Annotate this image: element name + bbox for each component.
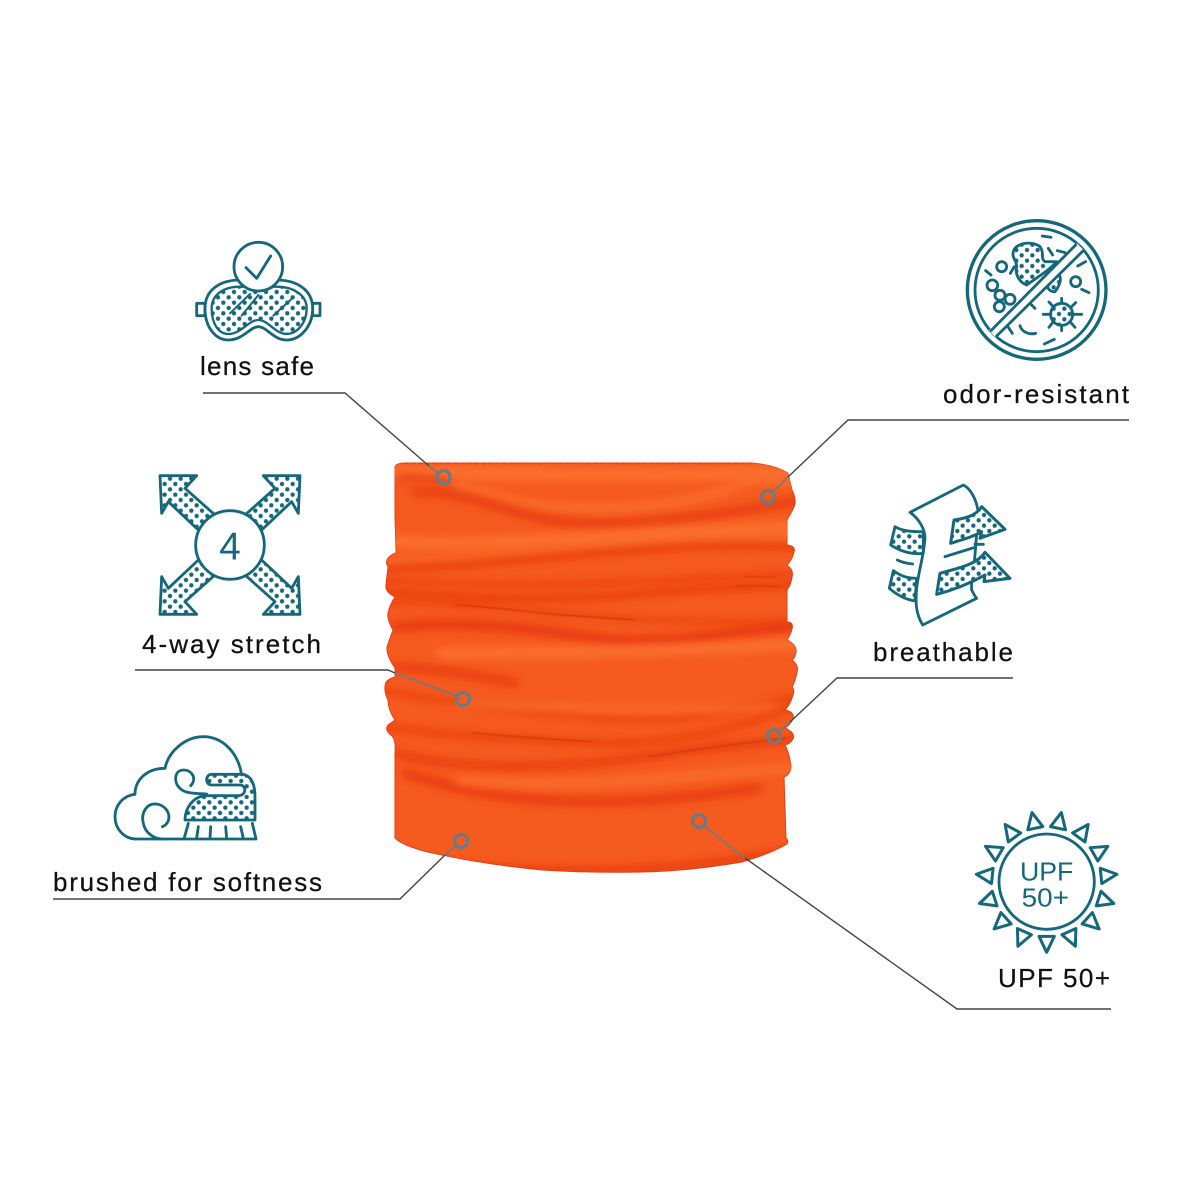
marker: UPF 50+ <box>692 814 706 828</box>
icon: 4-way stretch arrows <box>160 476 300 614</box>
marker: lens safe <box>437 470 450 484</box>
icon: 4-way stretch arrows: 4 <box>219 525 241 568</box>
icon: odor-resistant no-bacteria sign <box>967 221 1106 359</box>
marker: breathable <box>768 730 780 742</box>
marker: odor-resistant <box>762 490 774 504</box>
label: UPF 50+: UPF 50+ <box>998 963 1110 993</box>
label: odor-resistant: odor-resistant <box>943 379 1130 409</box>
leader line: brushed for softness <box>53 846 456 899</box>
leader line: UPF 50+ <box>704 826 1111 1009</box>
leader line: odor-resistant <box>773 420 1129 492</box>
product photo: orange neck gaiter <box>358 463 808 872</box>
icon: UPF 50+ sun <box>976 811 1118 952</box>
leader line: lens safe <box>203 393 438 473</box>
marker: brushed for softness <box>454 834 468 848</box>
leader line: 4-way stretch <box>135 670 457 696</box>
leader line: breathable <box>778 678 1013 732</box>
label: 4-way stretch: 4-way stretch <box>142 629 321 659</box>
label: lens safe: lens safe <box>200 351 314 381</box>
label: brushed for softness: brushed for softness <box>53 867 322 897</box>
icon: UPF 50+ sun: UPF <box>1020 856 1073 886</box>
icon: UPF 50+ sun: 50+ <box>1022 883 1069 913</box>
icon: goggles with check <box>197 242 320 340</box>
top hem <box>404 462 752 464</box>
icon: cloud with brush <box>115 737 256 839</box>
icon: breathable fabric with arrows <box>889 485 1010 625</box>
label: breathable: breathable <box>873 637 1013 667</box>
marker: 4-way stretch <box>456 692 470 706</box>
